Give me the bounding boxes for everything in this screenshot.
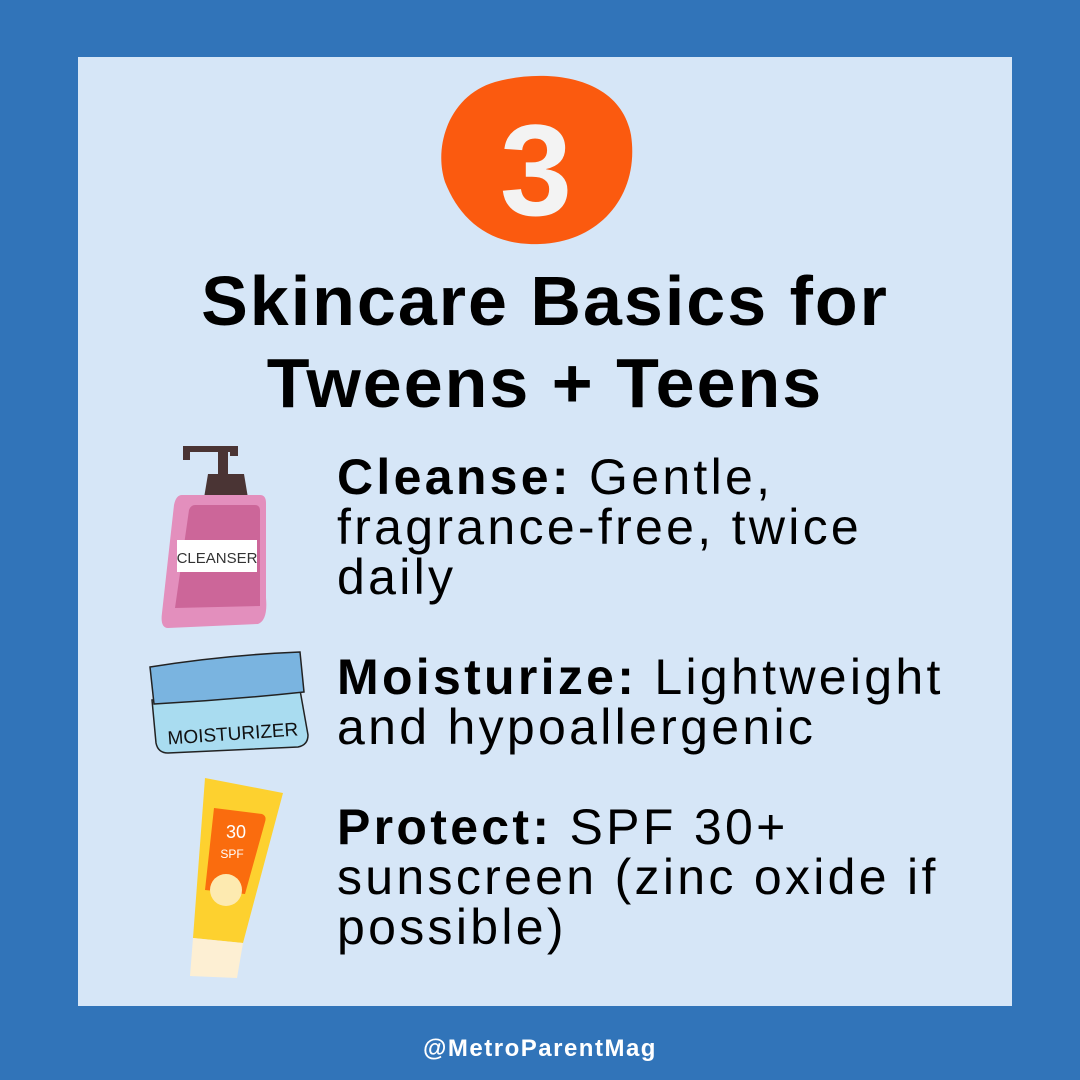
text: protect: possible) bbox=[337, 899, 567, 955]
title bbox=[201, 262, 889, 422]
text: protect: sunscreen (zinc oxide if bbox=[337, 849, 939, 905]
icon: moisturizer jar bbox=[149, 651, 309, 754]
text: cleanse: fragrance-free, twice bbox=[337, 499, 862, 555]
icon: cleanser bottle: CLEANSER bbox=[177, 550, 258, 567]
text: protect bbox=[337, 799, 939, 955]
icon: orange number badge bbox=[441, 76, 632, 244]
icon: sunscreen tube: 30 bbox=[226, 822, 246, 842]
title: Skincare Basics for bbox=[201, 262, 889, 340]
text: cleanse: Cleanse: Gentle, bbox=[337, 449, 773, 505]
text: moisturize: and hypoallergenic bbox=[337, 699, 816, 755]
icon: cleanser bottle bbox=[162, 446, 266, 628]
text: moisturize: Moisturize: Lightweight bbox=[337, 649, 944, 705]
text: cleanse bbox=[337, 449, 862, 605]
text: moisturize bbox=[337, 649, 944, 755]
text: protect: Protect: SPF 30+ bbox=[337, 799, 789, 855]
panel: background card bbox=[78, 57, 1012, 1006]
footer handle: @MetroParentMag bbox=[423, 1035, 657, 1062]
title: Tweens + Teens bbox=[267, 344, 823, 422]
text: cleanse: daily bbox=[337, 549, 456, 605]
icon: sunscreen tube: SPF bbox=[220, 847, 244, 861]
icon: orange number badge: 3 bbox=[500, 97, 572, 243]
icon: sunscreen tube bbox=[190, 778, 283, 978]
icon: moisturizer jar: MOISTURIZER bbox=[167, 719, 299, 750]
